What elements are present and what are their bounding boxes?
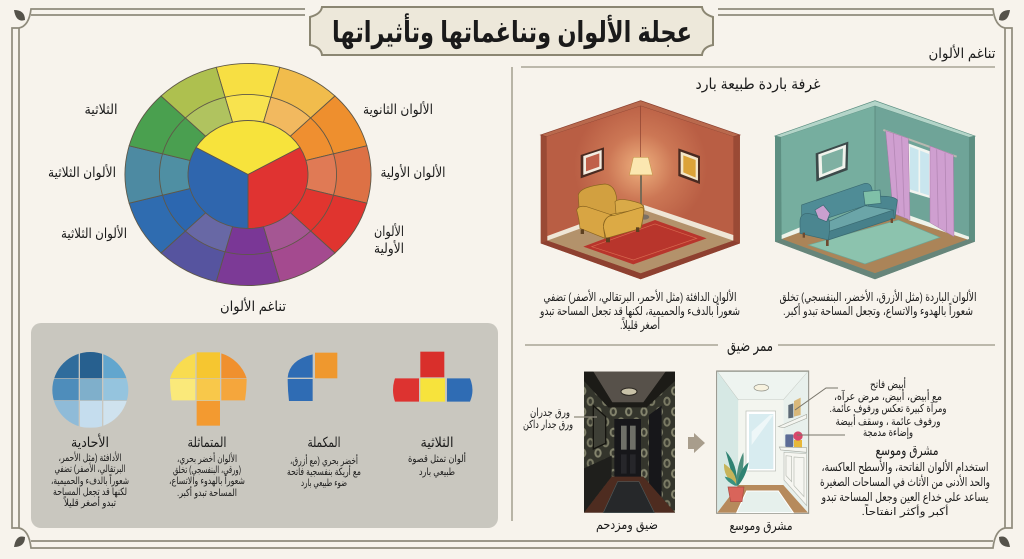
ceiling lamp [754, 384, 769, 391]
wheel labels [48, 101, 446, 315]
label: analogous: شعوراً بالهدوء والاتساع، [169, 473, 245, 487]
wheel labels: الألوان الثلاثية [61, 225, 127, 242]
label: triadic: ألوان تمثل قصوة [408, 452, 466, 465]
callout: bright finishes [795, 377, 946, 439]
label: monochromatic: الأدافئة (مثل الأحمر، [58, 451, 122, 464]
callout: dark wallpaper: ورق جدران [530, 407, 570, 419]
colour wheel [125, 64, 371, 285]
label: monochromatic: تبدو أصغر قليلاً [63, 496, 116, 509]
title plate [310, 7, 713, 55]
label: analogous: (ورقي، البنفسجي) تخلق [173, 465, 241, 476]
label: monochromatic: شعوراً بالدفء والحميمية، [51, 473, 129, 487]
potted plant [724, 451, 749, 502]
label: analogous: المتماثلة [188, 434, 226, 450]
caption: narrow and crowded: ضيق ومزدحم [596, 517, 658, 533]
floor and runner [584, 477, 675, 513]
swatch: analogous [170, 352, 247, 426]
picture left [581, 147, 604, 178]
callout: bright finishes: وإضاءة مدمجة [863, 427, 913, 439]
side door and wainscot [649, 406, 662, 498]
label: triadic: الثلاثية [420, 434, 454, 450]
illustration: cool room [775, 101, 975, 279]
floor and rug [717, 485, 808, 513]
primary centre [188, 121, 308, 228]
panel: harmony types [31, 323, 498, 528]
picture [816, 142, 848, 182]
illustration: warm room [541, 101, 740, 279]
mirror [593, 406, 606, 449]
wheel labels: الأولية [374, 240, 404, 257]
callout: bright finishes: ورفوف عائمة ، وسقف أبيضة [836, 414, 940, 428]
caption: cool colours: شعوراً بالهدوء والاتساع، وتجعل المساحة تبدو أكبر. [783, 302, 973, 319]
heading: colour harmony: تناغم الألوان [928, 44, 996, 62]
heading: narrow corridor: ممر ضيق [727, 338, 773, 356]
callout: bright finishes: أبيض فاتح [870, 377, 906, 391]
label: complementary: أخضر بحري (مع أزرق، [290, 454, 358, 467]
label: triadic [408, 434, 466, 478]
label: complementary: ضوء طبيعي بارد [301, 478, 347, 489]
swatch: monochromatic [50, 352, 130, 428]
wheel labels: تناغم الألوان [220, 297, 286, 315]
heading: cool room: غرفة باردة طبيعة بارد [696, 76, 821, 93]
label: monochromatic: البرتقالي، الأصفر) تضفي [54, 462, 126, 475]
wheel labels: الألوان الثانوية [363, 101, 433, 118]
wheel labels: الألوان الثلاثية [48, 164, 116, 181]
outer ring [125, 64, 371, 285]
caption: warm colours: أصغر قليلاً. [620, 317, 660, 333]
sofa [800, 183, 897, 246]
title: عجلة الألوان وتناغماتها وتأثيراتها [332, 13, 692, 49]
armchair [577, 184, 644, 242]
section divider lines [512, 67, 995, 521]
label: analogous [169, 434, 245, 499]
middle ring [160, 95, 336, 254]
floor lamp [629, 157, 653, 220]
callout: bright finishes: مع أبيض، أبيض، مرض عرآه، [834, 389, 942, 403]
callout: bright finishes: ومرآة كبيرة تعكس ورفوف عائمة. [830, 401, 946, 415]
rug [583, 220, 707, 264]
callout: dark wallpaper [523, 407, 597, 431]
wheel labels: الألوان [374, 223, 404, 240]
label: monochromatic [51, 433, 129, 509]
label: analogous: المساحة تبدو أكبر. [177, 486, 237, 499]
door [614, 419, 641, 477]
text block: bright and spacious: أكبر وأكثر انفتاحاً. [862, 504, 949, 518]
caption: warm colours: الألوان الدافئة (مثل الأحمر، البرتقالي، الأصفر) تضفي [544, 289, 736, 305]
caption: warm colours [539, 289, 740, 333]
wheel labels: الألوان الأولية [380, 164, 446, 181]
label: triadic: طبيعي بارد [419, 467, 455, 478]
label: monochromatic: لكنها قد تجعل المساحة [53, 487, 127, 498]
text block: bright and spacious: مشرق وموسع [876, 442, 938, 459]
caption: cool colours [780, 289, 976, 319]
wheel labels: الثلاثية [84, 102, 118, 117]
label: complementary: المكملة [308, 434, 340, 450]
arrow [688, 433, 705, 453]
illustration: bright corridor [717, 371, 809, 513]
label: analogous: الألوان أخضر بحري، [177, 452, 237, 465]
window and curtains [883, 130, 957, 237]
picture right [678, 148, 700, 184]
illustration: dark corridor [584, 372, 675, 513]
caption: bright and spacious: مشرق وموسع [730, 518, 792, 534]
swatch: complementary [288, 353, 337, 401]
label: complementary: مع أريكة بنفسجية فاتحة [287, 465, 361, 478]
rug [808, 220, 940, 264]
label: monochromatic: الأحادية [71, 433, 109, 450]
swatch: triadic [393, 352, 472, 402]
shelves and objects [778, 398, 807, 506]
callout: dark wallpaper: ورق جدار داكن [523, 419, 573, 431]
ceiling lamp [621, 388, 637, 395]
caption: warm colours: شعوراً بالدفء والحميمية، لكنها قد تجعل المساحة تبدو [539, 302, 740, 319]
label: complementary [287, 434, 361, 489]
text block: bright and spacious [820, 442, 990, 518]
mirror [746, 411, 776, 471]
